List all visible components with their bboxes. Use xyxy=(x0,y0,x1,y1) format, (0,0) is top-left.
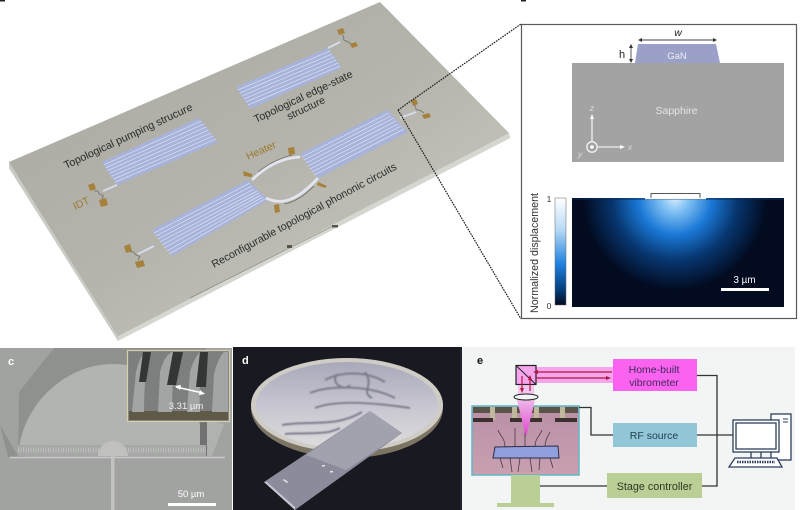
colour bar: Normalized displacement xyxy=(529,193,541,313)
inset xyxy=(128,350,230,422)
width arrow xyxy=(638,27,717,42)
label: heater: Heater xyxy=(244,139,278,163)
box: RF source xyxy=(613,423,697,447)
SEM background xyxy=(0,348,232,510)
box: RF source: RF source xyxy=(630,430,678,442)
panel d: chip on coin photo xyxy=(233,347,460,510)
IDT pads xyxy=(88,28,431,268)
label: IDT: IDT xyxy=(71,194,92,213)
box: home-built vibrometer: Home-built xyxy=(629,364,679,376)
panel a: chip schematic xyxy=(9,2,521,341)
label: GaN: GaN xyxy=(667,51,687,62)
ring with heaters xyxy=(243,147,327,213)
box: home-built vibrometer: vibrometer xyxy=(629,377,679,389)
axes: x xyxy=(627,142,633,152)
band: topological edge-state structure xyxy=(236,42,342,109)
glass chip xyxy=(264,411,402,510)
pink laser band xyxy=(536,367,613,383)
box: stage controller xyxy=(607,473,702,498)
scale bar: 3 um: 3 µm xyxy=(734,275,755,286)
frame xyxy=(522,24,796,318)
inset: 3.31 µm xyxy=(169,401,203,412)
axes: z xyxy=(589,103,595,113)
box: stage controller: Stage controller xyxy=(617,481,693,493)
focused laser beam xyxy=(517,400,535,437)
axes xyxy=(577,103,633,159)
scale bar: 50 um: 50 µm xyxy=(178,489,204,500)
label: topological edge-state structure: Topological edge-state xyxy=(252,68,355,126)
background xyxy=(462,347,795,510)
box: home-built vibrometer xyxy=(613,359,697,391)
dark divider between d and e xyxy=(460,347,462,510)
beam splitter xyxy=(516,366,536,394)
flower relief xyxy=(282,372,410,434)
label: reconfigurable topological phononic circuits: Reconfigurable topological phononic circuits xyxy=(210,161,399,271)
label: structure: structure xyxy=(285,94,327,123)
sapphire substrate xyxy=(572,63,784,162)
GaN waveguide xyxy=(635,44,720,63)
colour bar xyxy=(529,193,566,313)
panel b: cross-section and displacement map xyxy=(522,24,796,318)
panel letter e: e xyxy=(477,355,483,367)
chip plate xyxy=(9,2,510,341)
width arrow: w xyxy=(674,27,683,39)
dotted zoom lines xyxy=(398,24,521,319)
panel e: measurement setup xyxy=(462,347,795,510)
band: reconfigurable circuit right xyxy=(300,110,416,178)
label: topological pumping structure: Topological pumping strucure xyxy=(62,101,195,172)
panel letter c: c xyxy=(8,356,14,368)
scale bar: 3 um xyxy=(721,275,769,291)
wavy IDT connectors xyxy=(94,35,424,260)
panel letter d: d xyxy=(242,355,249,367)
lens xyxy=(514,394,538,400)
stage stand xyxy=(497,475,554,507)
band: reconfigurable circuit left xyxy=(138,180,268,256)
dark background xyxy=(233,347,460,510)
icon: computer xyxy=(729,414,791,467)
scale bar: 50 um xyxy=(168,489,216,506)
coin xyxy=(251,358,443,458)
colour bar: 1 xyxy=(547,194,552,204)
connector lines xyxy=(540,376,733,486)
height arrow: h xyxy=(619,49,625,61)
SEM transducer structure xyxy=(0,348,225,510)
corner letters cropped at top edge xyxy=(0,0,5,2)
red beam arrows xyxy=(533,370,612,380)
panel c: SEM image xyxy=(0,348,232,510)
axes: y xyxy=(577,149,583,159)
colour bar: 0 xyxy=(547,301,552,311)
band: topological pumping structure xyxy=(102,118,218,191)
displacement heat map xyxy=(572,194,784,307)
height arrow xyxy=(619,44,633,63)
label: sapphire: Sapphire xyxy=(655,105,698,117)
photo of sample stage xyxy=(472,406,579,475)
